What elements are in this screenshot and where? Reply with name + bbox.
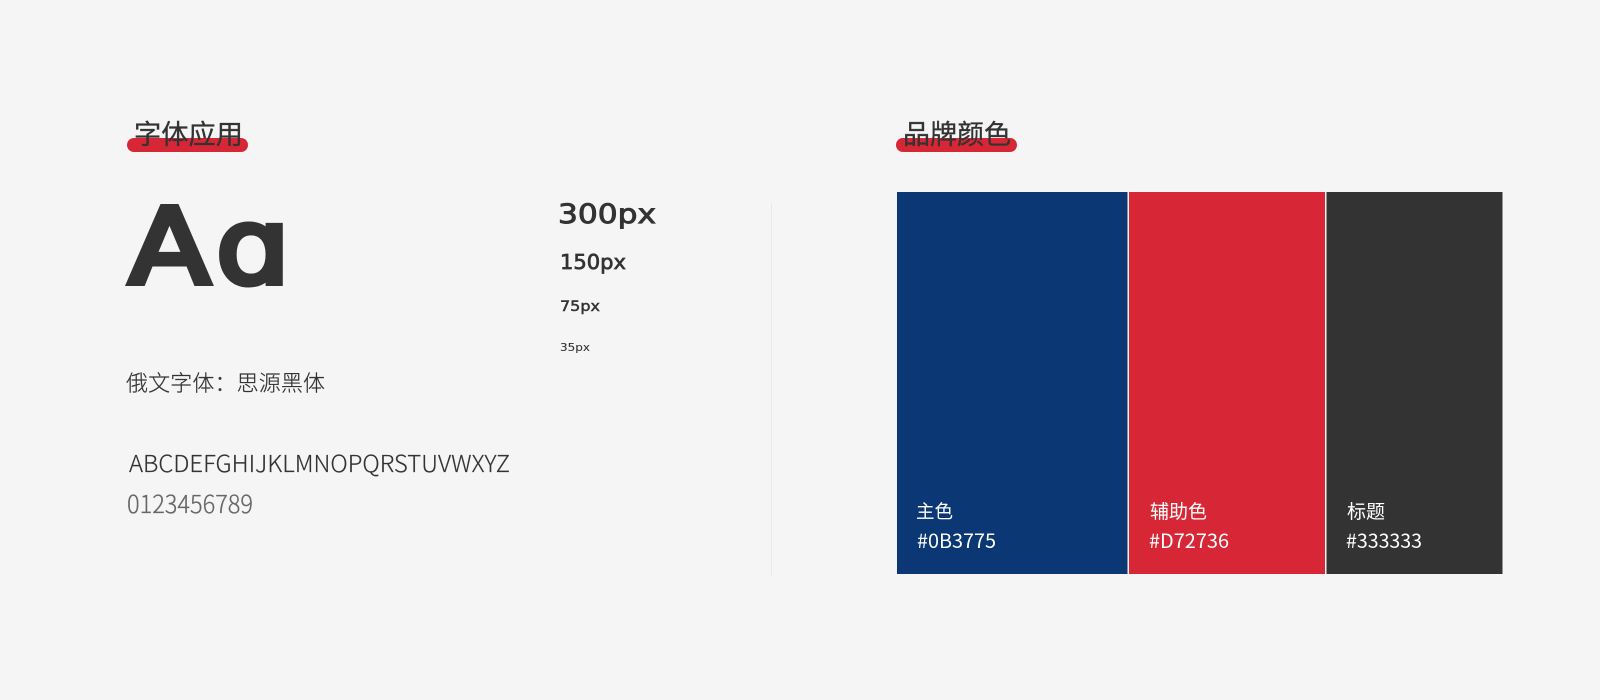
swatch: title grey xyxy=(1326,192,1502,574)
large type specimen Aa: A xyxy=(129,186,210,308)
alphabet specimen: ABCDEFGHIJKLMNOPQRSTUVWXYZ xyxy=(129,445,510,479)
large type specimen Aa xyxy=(129,186,290,308)
heading: font usage: 字体应用 xyxy=(134,113,243,152)
type size scale: 35px xyxy=(560,341,591,354)
panel: typography xyxy=(126,113,656,521)
type size scale: 75px xyxy=(560,299,600,315)
swatch: primary blue: #0B3775 xyxy=(917,525,996,554)
swatch: secondary red: #D72736 xyxy=(1149,525,1229,554)
heading: brand colours: 品牌颜色 xyxy=(903,113,1011,152)
type size scale: 150px xyxy=(560,250,626,274)
swatch: primary blue xyxy=(897,192,1128,574)
font name text: 俄文字体：思源黑体 xyxy=(126,366,325,398)
swatch: secondary red xyxy=(1129,192,1325,574)
large type specimen Aa: ɑ xyxy=(216,186,290,308)
swatch: title grey: #333333 xyxy=(1346,525,1422,554)
swatch: primary blue: 主色 xyxy=(916,498,953,524)
swatch: secondary red: 辅助色 xyxy=(1150,497,1207,524)
type size scale: 300px xyxy=(558,199,656,230)
swatch: title grey: 标题 xyxy=(1347,497,1385,524)
numerals specimen: 0123456789 xyxy=(127,485,253,521)
type size scale xyxy=(558,199,656,354)
panel: brand colours xyxy=(896,113,1502,574)
